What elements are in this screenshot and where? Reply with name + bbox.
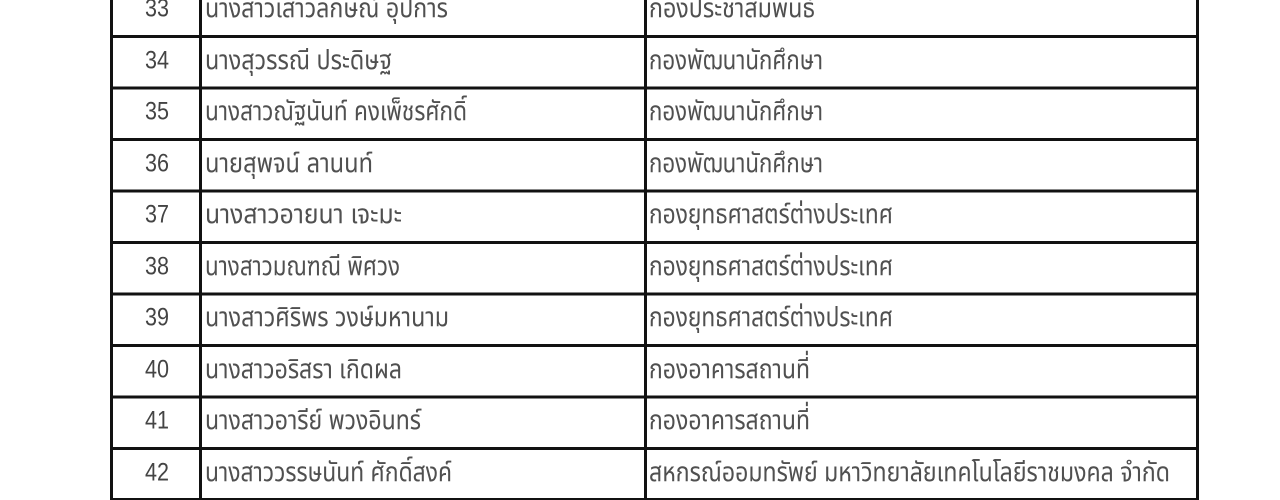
row 42: นางสาววรรษนันท์ ศักดิ์สงค์	[205, 457, 452, 487]
row 36: 36	[145, 150, 169, 178]
row 38: กองยุทธศาสตร์ต่างประเทศ	[649, 251, 893, 282]
row 34	[145, 45, 823, 76]
row 35	[145, 96, 823, 126]
row 37: 37	[145, 200, 169, 228]
row 40	[145, 350, 810, 384]
row 39	[145, 302, 893, 333]
row 41: 41	[145, 406, 169, 434]
row 38: 38	[145, 252, 169, 280]
row 38	[145, 251, 893, 282]
row 37	[145, 199, 893, 230]
row 37: นางสาวอายนา เจะมะ	[205, 199, 402, 229]
row 42: สหกรณ์ออมทรัพย์ มหาวิทยาลัยเทคโนโลยีราชมงคล จำกัด	[649, 457, 1170, 487]
row 42: 42	[145, 458, 169, 486]
row 40: 40	[145, 356, 169, 384]
row 35: นางสาวณัฐนันท์ คงเพ็ชรศักดิ์	[205, 96, 467, 126]
row 41: กองอาคารสถานที่	[649, 401, 810, 435]
row 36: กองพัฒนานักศึกษา	[649, 148, 823, 178]
row 36	[145, 148, 823, 179]
row 37: กองยุทธศาสตร์ต่างประเทศ	[649, 199, 893, 230]
row 39: 39	[145, 304, 169, 332]
row 34: นางสุวรรณี ประดิษฐ	[205, 45, 392, 76]
row 36: นายสุพจน์ ลานนท์	[205, 148, 373, 179]
row 35: 35	[145, 98, 169, 126]
row 41	[145, 401, 810, 435]
row 35: กองพัฒนานักศึกษา	[649, 96, 823, 126]
row 42	[145, 457, 1170, 487]
row 33	[145, 0, 815, 24]
row 40: นางสาวอริสรา เกิดผล	[205, 354, 402, 384]
row 34: 34	[145, 46, 169, 74]
row 34: กองพัฒนานักศึกษา	[649, 45, 823, 75]
row 38: นางสาวมณฑณี พิศวง	[205, 251, 400, 281]
row 41: นางสาวอารีย์ พวงอินทร์	[205, 405, 422, 435]
row 39: กองยุทธศาสตร์ต่างประเทศ	[649, 302, 893, 333]
row 39: นางสาวศิริพร วงษ์มหานาม	[205, 302, 449, 332]
row 40: กองอาคารสถานที่	[649, 350, 810, 384]
